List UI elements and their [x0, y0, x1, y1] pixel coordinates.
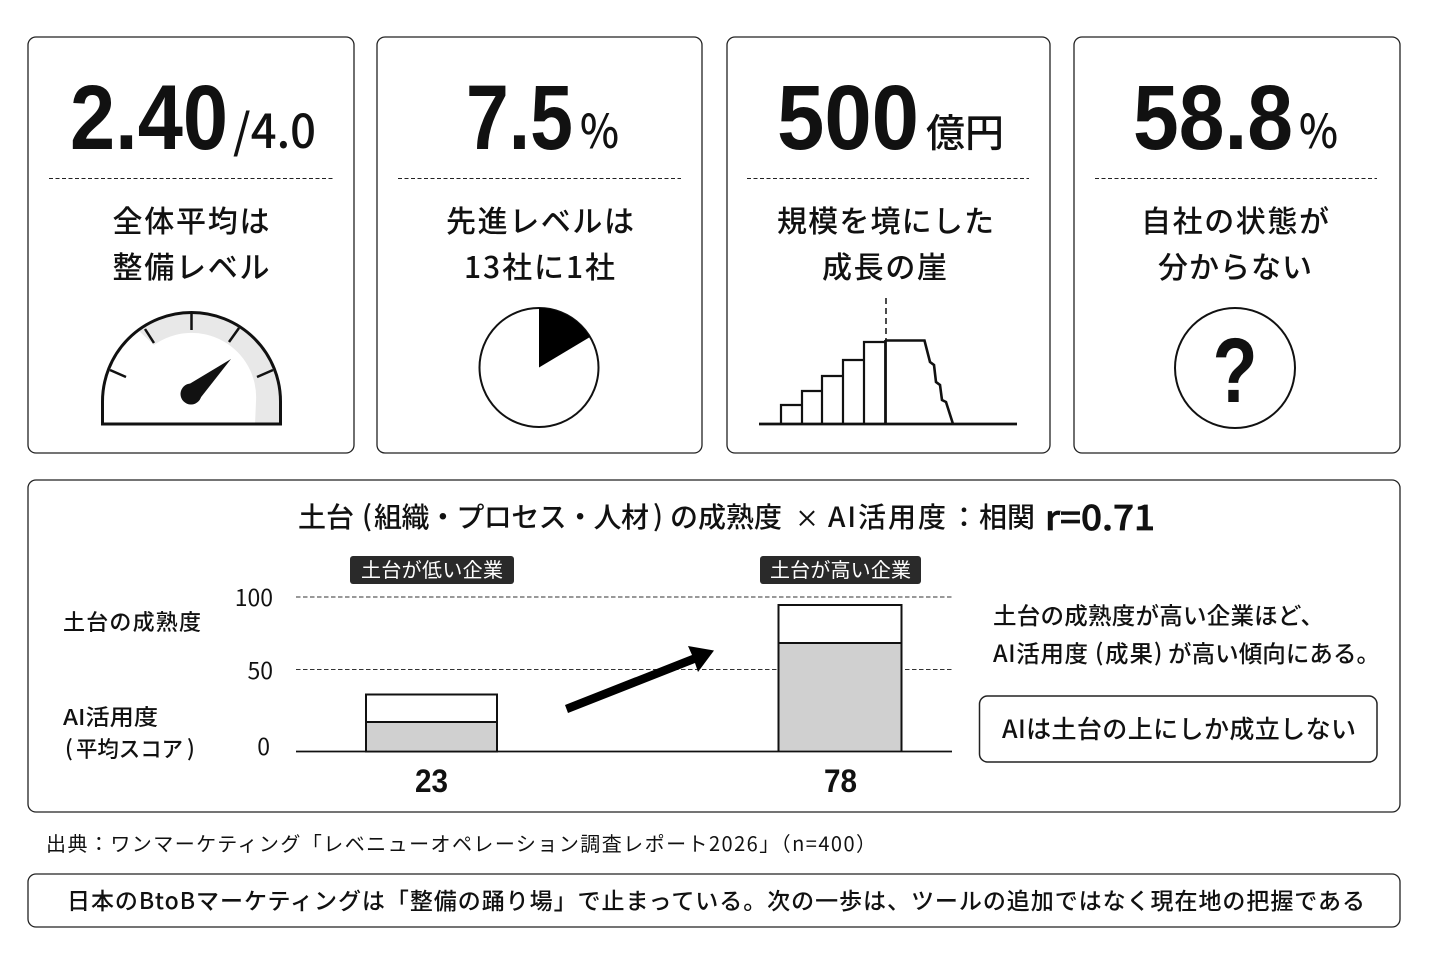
axis labels: 50: [247, 652, 273, 686]
text: correlation takeaway: 成果: [1105, 635, 1153, 669]
stat: 500 oku yen: [777, 67, 1004, 169]
stat: 500 oku yen: 億円: [926, 103, 1004, 159]
icon: gauge: [102, 312, 281, 424]
value: 23: 23: [415, 763, 448, 799]
text: overall average caption: 全体平均は: [112, 197, 270, 241]
stat: 7.5 percent: %: [580, 93, 619, 162]
tag: high foundation companies: 土台が高い企業: [770, 554, 911, 583]
icon: stair and cliff chart: [759, 298, 1017, 424]
panel: conclusion banner: [28, 874, 1400, 927]
label: AI usage average score: (: [65, 731, 73, 763]
panel: conclusion banner: 日本のBtoBマーケティングは「整備の踊り場」で止まっている。次の一歩は、ツールの追加ではなく現在地の把握である: [67, 882, 1365, 916]
panel: KPI 50 billion yen cliff: [727, 37, 1050, 453]
label: maturity of foundation: 土台の成熟度: [63, 605, 201, 637]
text: overall average caption: [112, 197, 270, 287]
panel: KPI advanced level: [377, 37, 702, 453]
axis labels: 0: [257, 728, 270, 762]
label: AI usage average score: 平均スコア: [76, 732, 183, 764]
text: correlation takeaway: (: [1095, 634, 1103, 668]
stat: 58.8 percent: %: [1299, 93, 1338, 162]
panel: correlation chart: [28, 480, 1400, 812]
label: AI usage average score: [63, 700, 195, 764]
stat: 2.40 out of 4.0: /4.0: [233, 93, 316, 162]
text: unknown state caption: [1141, 197, 1329, 287]
text: unknown state caption: 自社の状態が: [1141, 197, 1329, 241]
text: correlation takeaway: ): [1154, 634, 1162, 668]
text: growth cliff caption: [777, 197, 994, 287]
heading: correlation title: (: [362, 495, 372, 535]
heading: correlation title: ×: [795, 499, 819, 534]
callout: AI needs foundation: AIは土台の上にしか成立しない: [1002, 710, 1356, 746]
label: AI usage average score: ): [187, 731, 195, 763]
bar: low foundation group: [366, 694, 497, 752]
stat: 2.40 out of 4.0: 2.40: [70, 67, 228, 169]
text: unknown state caption: 分からない: [1158, 243, 1312, 287]
text: growth cliff caption: 規模を境にした: [777, 197, 994, 241]
label: AI usage average score: AI活用度: [63, 700, 158, 732]
text: growth cliff caption: 成長の崖: [822, 243, 947, 287]
text: source citation: 出典：ワンマーケティング「レベニューオペレーション調査レポート2026」（n=400）: [46, 828, 876, 857]
icon: pie chart: [480, 308, 598, 427]
panel: KPI unknown state: [1074, 37, 1400, 453]
heading: correlation title: [298, 491, 1155, 540]
heading: correlation title: AI活用度: [828, 496, 946, 536]
axis labels: [235, 579, 273, 762]
panel: KPI overall average: [28, 37, 354, 453]
heading: correlation title: ): [653, 495, 663, 535]
heading: correlation title: 組織・プロセス・人材: [374, 496, 649, 536]
icon: question mark: [1175, 308, 1295, 428]
text: overall average caption: 整備レベル: [112, 243, 270, 287]
stat: 7.5 percent: 7.5: [466, 67, 573, 169]
heading: correlation title: の成熟度: [670, 496, 782, 536]
icon: question mark: ?: [1212, 320, 1258, 422]
heading: correlation title: 土台: [298, 496, 354, 536]
heading: correlation title: ：: [950, 496, 978, 536]
callout: AI needs foundation: [980, 696, 1377, 762]
text: advanced level caption: 先進レベルは: [446, 197, 634, 241]
axis labels: 100: [235, 579, 273, 613]
heading: correlation title: r=0.71: [1045, 491, 1155, 540]
text: correlation takeaway: が高い傾向にある。: [1168, 635, 1380, 669]
text: correlation takeaway: 土台の成熟度が高い企業ほど、: [993, 597, 1324, 631]
text: correlation takeaway: AI活用度: [993, 635, 1088, 669]
text: advanced level caption: [446, 197, 634, 287]
stat: 500 oku yen: 500: [777, 67, 919, 169]
text: correlation takeaway: [993, 597, 1380, 669]
value: 78: 78: [824, 763, 857, 799]
text: advanced level caption: 13社に1社: [464, 243, 615, 287]
arrow: upward trend: [565, 646, 714, 713]
heading: correlation title: 相関: [979, 496, 1035, 536]
bar: high foundation group: [778, 605, 902, 751]
tag: low foundation companies: 土台が低い企業: [361, 554, 503, 583]
stat: 58.8 percent: 58.8: [1133, 67, 1293, 169]
